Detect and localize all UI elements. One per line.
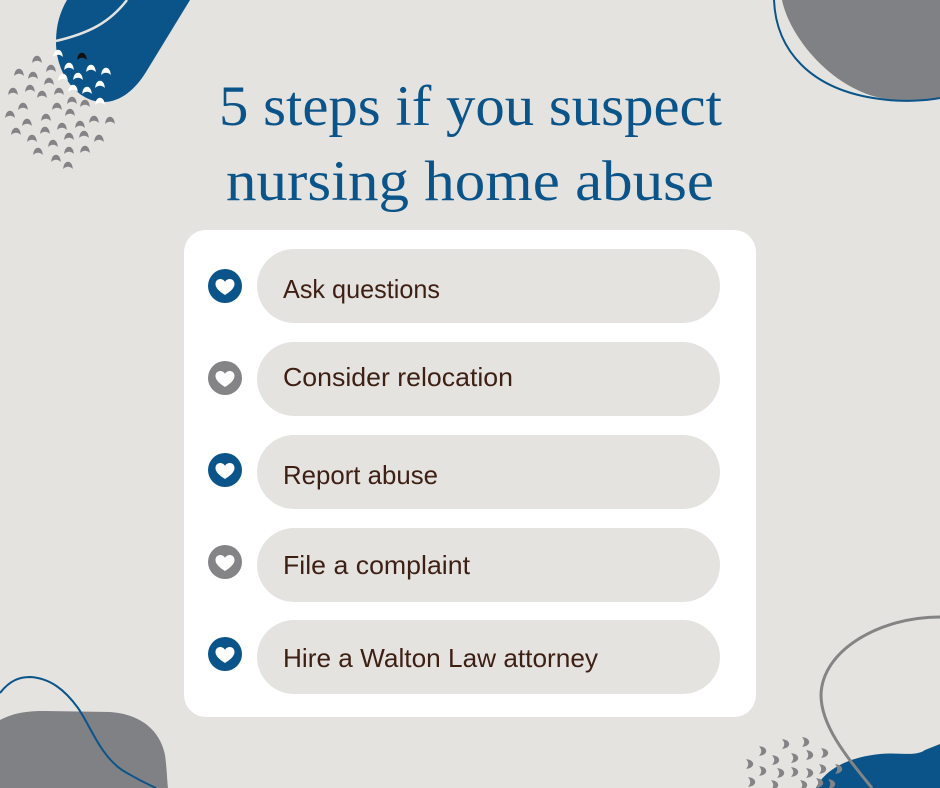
- step 3: Report abuse: [283, 460, 438, 490]
- decoration: bottom-left gray blob: [0, 711, 168, 788]
- decoration: top-right blue outline: [774, 0, 940, 101]
- decoration: top-right gray blob: [782, 0, 940, 100]
- title: [219, 75, 722, 213]
- step 5: Hire a Walton Law attorney: [283, 643, 598, 673]
- decoration: top-left blue blob: [56, 0, 190, 102]
- decoration: bottom-right gray outline: [821, 617, 940, 788]
- step 5: [208, 620, 720, 694]
- decoration: bottom-right blue blob: [816, 744, 940, 788]
- decoration: bottom-right dot cluster: [746, 737, 842, 788]
- title: nursing home abuse: [226, 150, 714, 213]
- step 3: [208, 435, 720, 509]
- panel: steps card: [184, 230, 756, 717]
- title: 5 steps if you suspect: [219, 75, 722, 138]
- step 2: Consider relocation: [283, 362, 513, 392]
- decoration: bottom-left blue line: [0, 677, 156, 788]
- step 4: [208, 528, 720, 602]
- step 1: [208, 249, 720, 323]
- decoration: top-left dot cluster: [5, 50, 115, 169]
- step 2: [208, 342, 720, 416]
- step 1: Ask questions: [283, 274, 440, 304]
- step 4: File a complaint: [283, 550, 471, 580]
